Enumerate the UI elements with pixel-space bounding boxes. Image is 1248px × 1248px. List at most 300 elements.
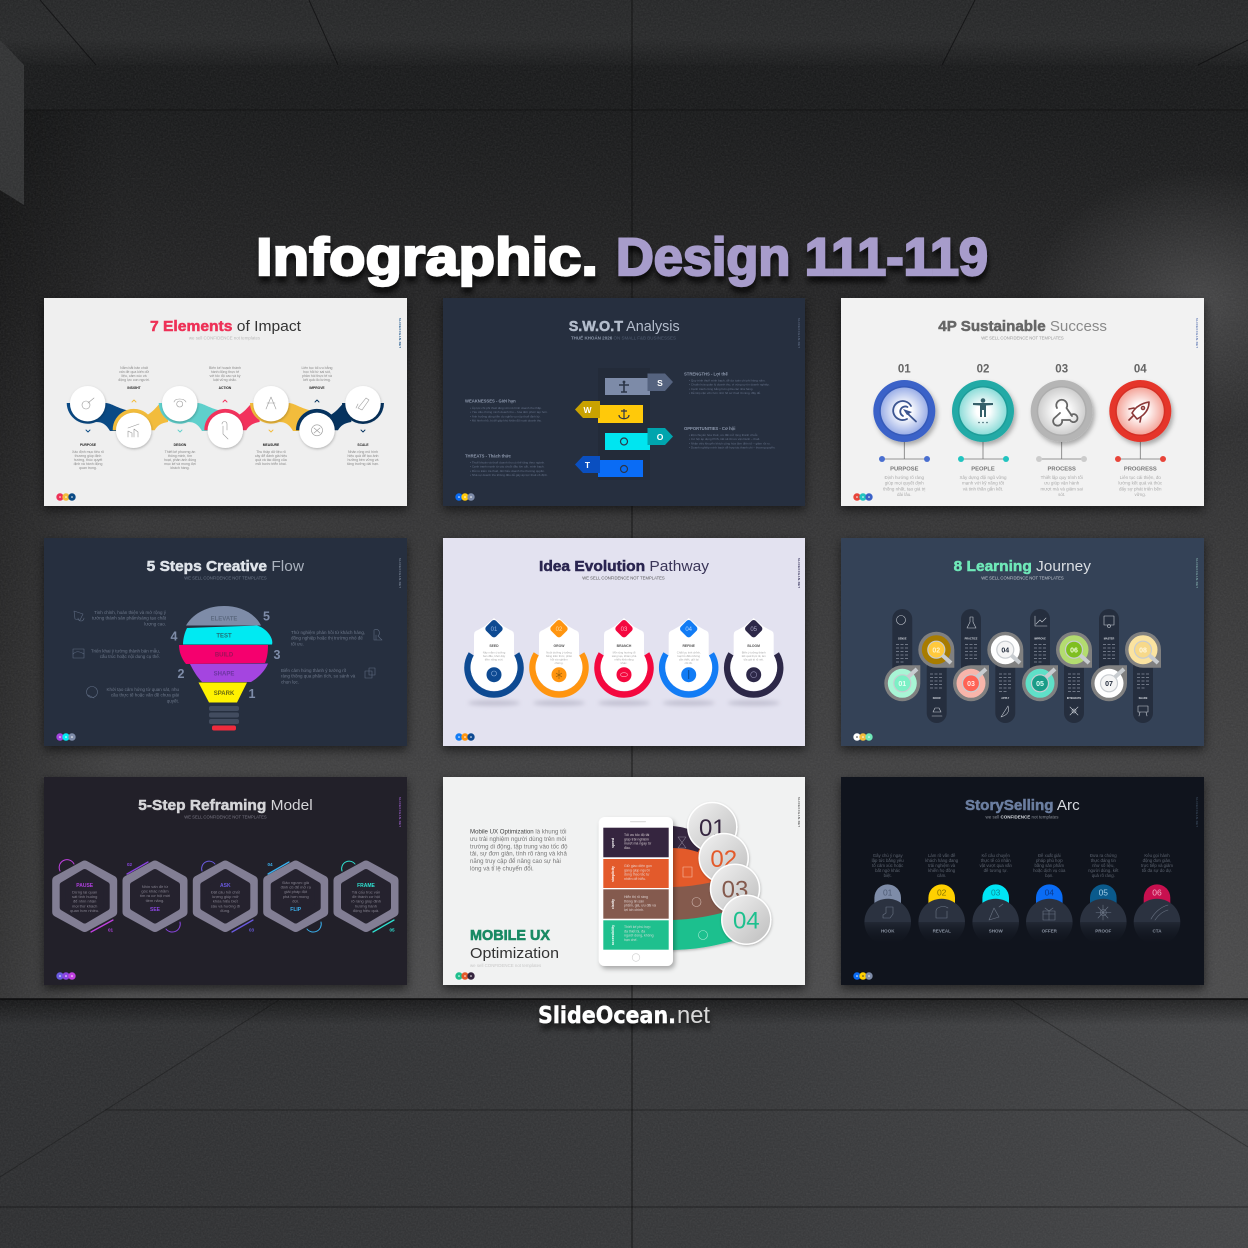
pill labels: KNOW — [933, 697, 941, 700]
step headings: FLIP — [290, 907, 302, 913]
step 05 bloom: tỏa giá trị rõ nét. — [744, 658, 764, 662]
panel: 4P Sustainable Success — [841, 298, 1204, 506]
column descriptions: khiến họ đồng — [928, 868, 956, 873]
step descriptions: thương giúp định — [75, 454, 101, 458]
step 02 grow: bằng kiến thức, phản — [546, 653, 573, 658]
column descriptions: lập tức bằng yêu — [872, 858, 904, 863]
step descriptions: mỗi bước triển khai. — [255, 461, 287, 466]
01 purpose: dài lâu. — [897, 492, 912, 497]
04 progress — [1109, 364, 1171, 497]
strengths text: • Quy trình thuế minh bạch, dễ dự toán chi phí hàng năm. — [689, 378, 765, 382]
band icons — [678, 837, 708, 940]
step descriptions: hướng hành — [355, 903, 377, 908]
opportunities text: • Nhận việc khuyến khích công hóa đơn điện tử – giảm rủi ro. — [689, 441, 771, 445]
tab numbers — [883, 888, 1162, 898]
threats text: • Thuế khoán và thuế doanh thu có thể tăng theo ngành. — [470, 460, 545, 464]
panel: 5-Step Reframing Model — [44, 777, 407, 985]
tab numbers: 04 — [1045, 888, 1054, 898]
side label: SLIDEOCEAN.NET — [797, 318, 801, 348]
upper pills — [892, 609, 1119, 679]
title: 4P Sustainable Success — [938, 318, 1107, 335]
column descriptions: thực đáng tin — [1091, 858, 1116, 863]
column descriptions: Kể câu chuyện — [981, 853, 1010, 858]
step descriptions: hướng, thúc quyết — [74, 458, 102, 462]
weaknesses text: • Ảnh hưởng dòng tiền do nghĩa vụ nộp thuế định kỳ. — [470, 413, 541, 418]
step headings: PAUSE — [76, 883, 94, 889]
step descriptions: Đặt câu hỏi chất — [211, 890, 240, 894]
logo dots — [56, 972, 76, 980]
step labels: SCALE — [357, 443, 369, 447]
floor shadows — [468, 700, 780, 706]
column descriptions: hoặc dịch vụ của — [1033, 868, 1066, 873]
column descriptions: thực tế có nhân — [981, 858, 1011, 863]
light bulb chart: ELEVATE — [211, 616, 237, 622]
column descriptions — [872, 853, 1173, 878]
column descriptions: biệt. — [884, 873, 892, 878]
02 people: 02 — [977, 364, 989, 376]
number circle 02 — [699, 834, 748, 882]
step labels: DESIGN — [174, 443, 187, 447]
token 05 — [1022, 665, 1058, 701]
phone row labels — [611, 838, 615, 945]
step descriptions: phá hơn mong — [283, 894, 309, 899]
strength bar: S — [657, 378, 663, 388]
subtitle: WE SELL CONFIDENCE NOT TEMPLATES — [981, 576, 1064, 580]
column descriptions: Gây chú ý ngay — [873, 853, 903, 858]
subtitle: WE SELL CONFIDENCE NOT TEMPLATES — [582, 576, 665, 580]
phone — [599, 817, 673, 966]
step descriptions: động hiệu quả. — [353, 908, 379, 913]
weakness bar: W — [583, 405, 592, 415]
pill labels: MASTER — [1104, 638, 1114, 640]
column descriptions: Làm rõ vấn đề — [928, 853, 955, 858]
logo dots — [853, 972, 873, 980]
step descriptions: phản hồi thực tế và — [302, 374, 332, 378]
step numbers: 5 — [263, 610, 270, 624]
step descriptions: liệu, cảm xúc và — [121, 374, 147, 378]
step headings: ASK — [220, 883, 231, 889]
dome labels: REVEAL — [933, 928, 951, 934]
side label: SLIDEOCEAN.NET — [1195, 797, 1199, 827]
strength bar — [605, 374, 673, 395]
column descriptions: người dùng, kết — [1088, 868, 1119, 873]
side label: SLIDEOCEAN.NET — [1195, 558, 1199, 588]
panel: SWOT Analysis — [443, 298, 805, 506]
token 07: 07 — [1105, 681, 1113, 688]
step descriptions: tìm ra cơ hội mới — [140, 893, 170, 898]
step descriptions: luật vững chắc. — [213, 377, 237, 382]
number circle 03: 03 — [722, 876, 748, 904]
tab numbers: 02 — [937, 888, 947, 898]
left descriptions: Triển khai ý tưởng thành bản mẫu, — [91, 648, 160, 654]
step descriptions: Biến kế hoạch thành — [209, 366, 241, 370]
phone row text: Tối ưu tốc độ tải — [624, 833, 649, 837]
token 06: 06 — [1070, 647, 1078, 654]
pill labels: SENSE — [898, 638, 907, 640]
02 people: Xây dựng đội ngũ vững — [959, 475, 1007, 480]
panel: 8 Learning Journey — [841, 538, 1204, 746]
right descriptions: tối ưu. — [291, 641, 304, 646]
column descriptions: Đưa ra chứng — [1090, 853, 1117, 858]
left descriptions — [91, 609, 179, 703]
step descriptions: Nhân rộng mô hình — [348, 450, 378, 454]
token 03: 03 — [967, 681, 975, 688]
step descriptions: hiệu quả để tạo ảnh — [348, 454, 379, 458]
phone row text: hạn chế. — [624, 938, 637, 942]
opportunities text: • Đột chuyển hóa thuế, ưu đãi mở rộng thành chuỗi. — [689, 433, 758, 437]
step descriptions: sâu và hướng đi — [211, 903, 240, 908]
step numbers: 3 — [274, 648, 281, 662]
right descriptions: chọn lọc. — [281, 679, 299, 684]
phone row text: đa thiết bị, đa — [624, 929, 645, 933]
step descriptions: hưởng bền vững và — [348, 458, 379, 462]
04 progress: đẩy sự phát triển bền — [1119, 485, 1162, 491]
left descriptions: cầu thực tế hoặc vấn đề chưa giải — [111, 693, 179, 698]
light bulb chart: SHAPE — [214, 672, 234, 678]
column descriptions: Kêu gọi hành — [1144, 853, 1170, 858]
01 purpose: thống nhất, tạo giá trị — [883, 486, 925, 491]
strengths text: STRENGTHS - Lợi thế — [684, 372, 728, 376]
01 purpose: 01 — [898, 364, 911, 376]
step numbers: 1 — [249, 687, 256, 701]
accent numbers: 04 — [267, 862, 273, 867]
tab numbers: 05 — [1099, 888, 1108, 898]
pill labels: SHARE — [1139, 697, 1148, 700]
step numbers: 4 — [171, 630, 178, 644]
step 01 seed: SEED — [489, 644, 499, 648]
step descriptions: sát tình huống — [72, 894, 97, 899]
title: 5-Step Reframing Model — [138, 797, 313, 814]
side label: SLIDEOCEAN.NET — [398, 797, 402, 827]
step 05 bloom: 05 — [750, 627, 758, 633]
step descriptions: Xác định mục tiêu rõ — [72, 450, 104, 454]
right descriptions: đồng nghiệp hoặc thị trường nhỏ để — [291, 635, 363, 641]
step descriptions: rõ ràng giúp định — [351, 899, 381, 904]
title — [470, 927, 559, 968]
phone row text: lợi ích chính. — [624, 908, 644, 912]
04 progress: lường kết quả và thúc — [1118, 481, 1163, 486]
column descriptions: khách hàng đang — [925, 858, 959, 863]
step descriptions: Liên tục tối ưu bằng — [302, 366, 332, 370]
column descriptions: vật vượt qua vấn — [979, 863, 1013, 868]
step labels: INSIGHT — [127, 386, 141, 390]
step 01 seed — [468, 618, 520, 694]
02 people: mạnh với kỹ năng tốt — [962, 481, 1005, 486]
phone row text: người dùng, không — [624, 934, 654, 938]
phone row text: giúp trải nghiệm — [624, 837, 649, 841]
step descriptions: đề thành cơ hội — [352, 894, 380, 899]
phone row text: phẩm, giá, ưu đãi và — [624, 904, 656, 908]
step 02 grow: 02 — [556, 627, 563, 633]
dome labels: PROOF — [1095, 928, 1112, 934]
light bulb chart: BUILD — [215, 652, 234, 658]
logo dots — [455, 972, 475, 980]
logo dots — [455, 493, 475, 501]
accent numbers — [108, 862, 395, 932]
step descriptions — [70, 880, 381, 913]
weaknesses text: • Áp lực chi phí thuế tăng với mô hình doanh thu thấp. — [470, 406, 542, 410]
tab numbers: 06 — [1152, 888, 1162, 898]
step 04 refine: loại bỏ điều không — [677, 654, 700, 658]
step descriptions: Tái cấu trúc vấn — [352, 890, 380, 894]
step descriptions: định và hành động — [74, 462, 102, 466]
step descriptions: Nắm bắt bản chất — [120, 366, 148, 370]
step circles — [70, 386, 381, 448]
weaknesses text: • Mô hình nhỏ, bị dễ gặp khó khăn đối soát doanh thu. — [470, 418, 542, 423]
token 06 — [1056, 632, 1092, 668]
step 01 seed: Nảy mầm ý tưởng — [483, 650, 505, 654]
step descriptions — [72, 365, 379, 470]
panel: Idea Evolution Pathway — [443, 538, 805, 746]
accent arcs and lines — [59, 860, 394, 932]
step descriptions: Nhìn vấn đề từ — [142, 884, 168, 889]
dome labels — [881, 928, 1162, 934]
step descriptions: cây để đánh giá hiệu — [255, 454, 287, 458]
step descriptions: Đảo ngược giả — [282, 880, 309, 885]
token 08 — [1125, 632, 1161, 668]
01 purpose: giúp mọi quyết định — [885, 481, 924, 486]
step 02 grow: hồi và nghiệm — [550, 658, 568, 662]
pill labels: PRACTICE — [965, 638, 978, 640]
step descriptions: tăng trưởng dài hạn. — [347, 462, 379, 466]
weaknesses text: WEAKNESSES - Giới hạn — [465, 398, 516, 404]
step descriptions: giải pháp đột — [284, 889, 308, 894]
threats text: • Cạnh tranh mạnh từ các chuỗi đầu lớn cắt, minh bạch. — [470, 464, 545, 469]
step descriptions: học hỏi từ sai sót, — [303, 370, 331, 374]
central column — [598, 368, 650, 480]
number circle 04: 04 — [733, 908, 760, 934]
03 process: mượt mà và giảm sai — [1040, 486, 1083, 491]
step 02 grow — [532, 618, 586, 694]
panel: Mobile UX Optimization — [443, 777, 805, 985]
subtitle: THUẾ KHOÁN 2026 ON SMALL F&B BUSINESSES — [571, 334, 676, 340]
subtitle: we sell CONFIDENCE not templates — [189, 336, 261, 340]
wave ribbon — [67, 403, 384, 431]
number circle 03 — [710, 864, 760, 913]
column descriptions: bất ngờ khác — [875, 868, 901, 873]
side label: SLIDEOCEAN.NET — [398, 318, 402, 348]
step 05 bloom: kết quả thực tế, lan — [742, 654, 766, 658]
title: we sell CONFIDENCE not templates — [470, 963, 542, 968]
dark domes — [864, 899, 1180, 945]
step descriptions: thông minh, tìm — [168, 454, 192, 458]
03 process — [1031, 364, 1093, 497]
accent numbers: 01 — [108, 928, 113, 932]
threat bar: T — [585, 460, 591, 470]
01 purpose: Định hướng rõ ràng — [885, 475, 924, 480]
number circle 01: 01 — [699, 815, 726, 842]
03 process: ưu giúp vận hành — [1044, 481, 1080, 486]
step headings — [76, 883, 376, 913]
03 process: sót. — [1058, 492, 1065, 497]
step descriptions: quả và tác động của — [255, 458, 287, 462]
accent numbers: 05 — [389, 928, 395, 932]
03 process: 03 — [1055, 364, 1068, 376]
pill labels — [898, 638, 1148, 700]
chevrons — [86, 400, 365, 432]
token 01: 01 — [898, 681, 906, 688]
column descriptions: tố cảm xúc hoặc — [872, 863, 904, 868]
step descriptions: định cũ để mở ra — [281, 885, 312, 890]
title: Optimization — [470, 945, 559, 962]
token 01 — [884, 665, 920, 701]
side line icons — [73, 611, 382, 698]
footer brand: net — [677, 1002, 710, 1029]
03 process: PROCESS — [1048, 466, 1076, 472]
step descriptions: đúng. — [220, 908, 230, 913]
pill labels: APPLY — [1001, 697, 1010, 700]
dome labels: OFFER — [1042, 928, 1058, 934]
opportunities text: OPPORTUNITIES - Cơ hội — [684, 426, 735, 431]
token 04: 04 — [1001, 647, 1009, 654]
panel: 7 Elements of Impact — [44, 298, 407, 506]
step 01 seed: tiềm năng mới. — [485, 658, 504, 662]
step 05 bloom: Biến ý tưởng thành — [742, 650, 766, 654]
column descriptions: bằng sản phẩm — [1034, 863, 1065, 868]
step labels: PURPOSE — [80, 443, 97, 447]
step headings: SEE — [150, 907, 161, 913]
strengths text: • Dễ tiếp cận vốn hơn nhờ hồ sơ thuế rõ ràng, đầy đủ. — [689, 390, 761, 395]
subtitle: WE SELL CONFIDENCE NOT TEMPLATES — [184, 576, 267, 580]
step 02 grow: chứng. — [555, 661, 564, 665]
step descriptions: đợi. — [292, 898, 299, 903]
phone row text: gàng giúp người — [624, 868, 650, 872]
step 05 bloom — [727, 618, 780, 694]
phone row text: thông tin sản — [624, 899, 644, 903]
number circle 01 — [688, 802, 737, 852]
step descriptions: Thiết kế phương án — [165, 450, 195, 454]
side label: SLIDEOCEAN.NET — [398, 558, 402, 588]
threats text: • Nhà sự doanh thu không đều dễ gây áp lực thuế cố định. — [470, 472, 548, 477]
phone row text: đầu. — [624, 846, 631, 850]
hexagon centers — [63, 872, 388, 920]
lower pills — [927, 658, 1153, 723]
step descriptions: hành động thực tế — [211, 370, 239, 374]
step 03 branch: nhiều khả năng — [614, 658, 634, 662]
step descriptions: khách hàng. — [170, 466, 190, 470]
step descriptions: lượng giúp mở — [212, 894, 239, 899]
pill text lines — [896, 644, 1150, 692]
column descriptions: bạn. — [1045, 873, 1053, 878]
column descriptions: trải nghiệm và — [928, 863, 956, 868]
main title: Design 111-119 — [616, 228, 988, 287]
side label: SLIDEOCEAN.NET — [797, 797, 801, 827]
step descriptions: Dừng lại quan — [72, 890, 97, 894]
weaknesses text — [465, 398, 548, 423]
column descriptions: cảm. — [937, 873, 946, 878]
opportunity bar: O — [657, 432, 664, 442]
number circle 04 — [722, 895, 771, 944]
step descriptions: Thu thập dữ liệu rõ — [256, 450, 286, 454]
step 04 refine: cần thiết, giữ lại — [679, 658, 699, 662]
logo dots — [56, 493, 76, 501]
title: 5 Steps Creative Flow — [147, 558, 304, 575]
right descriptions — [281, 629, 365, 684]
column descriptions: đề tương tự. — [984, 868, 1008, 873]
step descriptions: mọi thứ khách — [72, 903, 97, 908]
step 04 refine: REFINE — [682, 644, 696, 648]
strengths text — [684, 372, 770, 395]
01 purpose: PURPOSE — [890, 466, 919, 472]
title: Idea Evolution Pathway — [539, 558, 710, 575]
strengths text: • Cạnh tranh công bằng hơn giữa các nhà hàng. — [689, 386, 753, 391]
panel: 5 Steps Creative Flow — [44, 538, 407, 746]
03 process: Thiết lập quy trình tối — [1041, 475, 1083, 480]
left descriptions: Khởi tạo cảm hứng từ quan sát, nhu — [106, 687, 179, 692]
token 03 — [953, 665, 989, 701]
token 05: 05 — [1036, 681, 1044, 688]
phone row text: nhiên dễ hiểu. — [624, 876, 646, 881]
logo dots — [853, 493, 873, 501]
step 03 branch: sáng tạo, khám phá — [612, 654, 637, 658]
dome labels: HOOK — [881, 928, 895, 934]
step 03 branch: khác. — [621, 661, 628, 665]
opportunities text: • Doanh nghiệp minh bạch dễ hợp tác thanh chi – thương quyền. — [689, 445, 776, 450]
step descriptions: tiềm năng. — [146, 898, 164, 903]
step descriptions: quan trọng. — [79, 466, 97, 470]
main title — [256, 228, 988, 287]
dome icons — [883, 904, 1168, 920]
step numbers — [171, 610, 281, 701]
step 02 grow: GROW — [554, 644, 565, 648]
intro paragraph: ưu trải nghiệm người dùng trên môi — [470, 836, 566, 843]
tab numbers: 03 — [991, 888, 1001, 898]
light bulb chart: SPARK — [214, 691, 235, 697]
curved bands — [668, 826, 743, 950]
phone row text: Thiết kế phù hợp — [624, 925, 650, 929]
intro paragraph: Mobile UX Optimization là khung tối — [470, 828, 567, 836]
step descriptions: góc khác nhằm — [141, 889, 169, 894]
04 progress: 04 — [1134, 364, 1147, 376]
column descriptions: trực tiếp và giảm — [1141, 863, 1173, 868]
phone row text: Hiển thị rõ ràng — [624, 895, 648, 899]
phone row text: dùng thao tác tự — [624, 873, 650, 877]
02 people: và tinh thần gắn kết. — [963, 485, 1003, 491]
token 08: 08 — [1139, 647, 1147, 654]
title: 8 Learning Journey — [954, 558, 1091, 575]
weakness bar — [575, 401, 643, 423]
phone row labels: clarity — [611, 899, 615, 909]
column descriptions: như số liệu, — [1092, 863, 1115, 868]
logo dots — [455, 733, 475, 741]
step 04 refine: 04 — [685, 627, 693, 633]
phone row labels: accessibility — [611, 925, 615, 945]
phone row labels: speed — [611, 838, 615, 848]
side label: SLIDEOCEAN.NET — [1195, 318, 1199, 348]
side label: SLIDEOCEAN.NET — [797, 558, 801, 588]
opportunities text — [684, 426, 776, 450]
04 progress: vững. — [1135, 492, 1146, 497]
threat bar — [575, 456, 643, 477]
right descriptions: Thử nghiệm phản hồi từ khách hàng, — [291, 630, 365, 635]
step descriptions: khóa hiểu biết — [213, 899, 239, 904]
step headings: FRAME — [357, 883, 376, 889]
02 people: PEOPLE — [971, 466, 995, 472]
tab numbers: 01 — [883, 888, 893, 898]
step 02 grow: Nuôi dưỡng ý tưởng — [546, 650, 572, 654]
logo dots — [56, 733, 76, 741]
pill icons — [896, 616, 1148, 717]
left descriptions: lượng cao. — [144, 621, 166, 626]
title: StorySelling Arc — [965, 797, 1080, 814]
right descriptions: ràng thông qua phân tích, so sánh và — [281, 674, 356, 679]
step descriptions: vấn đề qua kiến dữ — [119, 370, 150, 374]
accent numbers: 02 — [127, 862, 132, 867]
threats text: • Rủi ro kiểm tra thuế, đòi hiểu doanh thu thương quyền. — [470, 469, 545, 473]
accent numbers: 03 — [249, 928, 254, 932]
left descriptions: Tinh chỉnh, hoàn thiện và mở rộng ý — [94, 610, 166, 615]
step 05 bloom: BLOOM — [747, 644, 760, 648]
